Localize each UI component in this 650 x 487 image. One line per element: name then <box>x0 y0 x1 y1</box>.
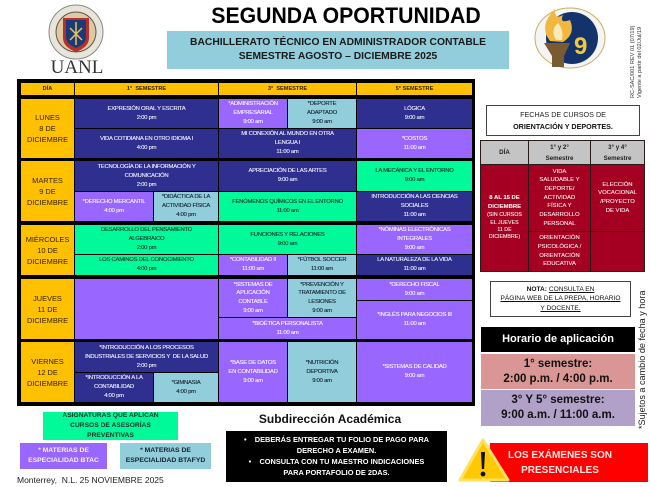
cell: Orientación: EDUCATIVA <box>543 261 576 267</box>
cell: Pensamiento algebraico <box>75 225 218 254</box>
cell: Funciones y relaciones: 9:00 am <box>278 240 297 246</box>
cell: Introducción ciencias sociales: 11:00 am <box>403 212 426 218</box>
cell: dates <box>481 165 528 271</box>
cell: Expresión oral: EXPRESIÓN ORAL Y ESCRITA <box>108 106 185 112</box>
cell: Naturaleza de la vida <box>357 255 472 275</box>
cell: Tecnología <box>75 161 218 191</box>
heading: application schedule <box>481 327 635 352</box>
cell: La mecánica: 9:00 am <box>405 177 424 183</box>
cell: Sistemas de aplicación: *SISTEMAS DE <box>234 282 272 288</box>
cell: Contabilidad II: *CONTABILIDAD II <box>230 257 276 263</box>
day: Wednesday: DICIEMBRE <box>27 256 68 266</box>
cell: Deporte adaptado: ADAPTADO <box>307 110 337 116</box>
day: Monday: DICIEMBRE <box>27 135 68 144</box>
panel: instructions: • CONSULTA CON TU MAESTRO INDICACIONES <box>249 457 424 466</box>
cell: Derecho mercantil: 4:00 pm <box>104 208 124 214</box>
logo: Preparatoria 9 <box>534 8 606 68</box>
cell: Introducción ciencias sociales: INTRODUCCIÓN A LAS CIENCIAS <box>371 194 458 200</box>
cell: Deporte adaptado <box>288 99 356 128</box>
subtitle banner: SEMESTRE AGOSTO – DICIEMBRE 2025 <box>239 51 437 62</box>
cell: Inglés para negocios <box>357 301 472 339</box>
cell: Vida saludable: VIDA <box>553 169 566 175</box>
cell: Naturaleza de la vida: LA NATURALEZA DE LA VIDA <box>377 257 452 263</box>
cell: Naturaleza de la vida: 11:00 am <box>403 266 426 272</box>
title: SEGUNDA OPORTUNIDAD <box>211 3 481 28</box>
header: 3rd and 4th semester <box>591 141 644 164</box>
day: Wednesday: 10 DE <box>37 246 58 254</box>
cell: Didáctica <box>154 192 218 221</box>
cell: Gimnasia: 4:00 pm <box>176 388 196 394</box>
day: Thursday <box>21 279 74 339</box>
cell: Elección vocacional: DE VIDA <box>606 208 629 214</box>
cell: Fenómenos químicos <box>219 192 356 221</box>
day: Tuesday: DICIEMBRE <box>27 198 68 206</box>
day: Tuesday <box>21 161 74 221</box>
block: first semester schedule: 1° semestre: <box>524 358 592 370</box>
day: Thursday: 11 DE <box>37 304 57 314</box>
header: 3rd semester: 3° SEMESTRE <box>268 86 307 92</box>
cell: Expresión oral <box>75 99 218 128</box>
cell: Vida saludable: DEPORTE/ <box>544 186 574 192</box>
legend: preventive courses <box>43 412 178 440</box>
cell: Sistemas de calidad: 9:00 am <box>405 373 424 379</box>
cell: Mi conexión: LENGUA I <box>275 140 300 146</box>
icon: warning triangle <box>458 438 510 482</box>
cell: Nóminas electrónicas: INTEGRALES <box>397 236 432 242</box>
cell: dates: 11 DE <box>497 227 512 233</box>
cell: Administración empresarial: EMPRESARIAL <box>233 110 273 116</box>
cell: dates: 8 AL 15 DE <box>489 195 520 201</box>
cell: La mecánica <box>357 161 472 191</box>
banner: exams in person: LOS EXÁMENES SON <box>508 450 612 460</box>
panel: instructions: DERECHO A EXAMEN. <box>297 446 376 455</box>
cell: Pensamiento algebraico: ALGEBRAICO <box>129 236 164 242</box>
legend: preventive courses: ASIGNATURAS QUE APLICAN <box>62 412 159 419</box>
subtitle banner <box>167 31 509 69</box>
cell: Deporte adaptado: *DEPORTE <box>308 101 336 107</box>
note box <box>490 281 631 317</box>
cell: Inglés para negocios: 11:00 am <box>403 321 426 327</box>
cell: Prevención: TRATAMIENTO DE <box>298 290 346 296</box>
day: Tuesday: 9 DE <box>39 186 56 196</box>
header: day <box>21 83 74 95</box>
cell: Procesos industriales: 2:00 pm <box>137 362 156 368</box>
document code: Vigente a partir del 02/Jul/19 <box>637 27 643 98</box>
heading: orientation and sports dates: FECHAS DE CURSOS DE <box>520 110 606 118</box>
cell: Introducción contabilidad: *INTRODUCCIÓN A LA <box>85 375 143 381</box>
legend: preventive courses: CURSOS DE ASESORÍAS <box>70 422 151 429</box>
cell: empty first semester Thursday <box>75 279 218 339</box>
cell: Sistemas de aplicación: CONTABLE <box>238 299 268 305</box>
cell: Deporte adaptado: 9:00 am <box>312 119 332 125</box>
cell: Contabilidad II: 11:00 am <box>242 266 264 272</box>
day: Friday <box>21 342 74 402</box>
panel: instructions: PARA PORTAFOLIO DE 2DAS. <box>283 468 390 477</box>
cell: Contabilidad II <box>219 255 287 275</box>
cell: Sistemas de aplicación: APLICACIÓN <box>236 290 270 296</box>
header: 5th semester <box>357 83 472 95</box>
cell: Tecnología: COMUNICACIÓN <box>125 172 168 178</box>
cell: dates: DICIEMBRE <box>488 204 521 210</box>
cell: Introducción contabilidad <box>75 373 153 402</box>
cell: Didáctica: ACTIVIDAD FÍSICA <box>162 203 210 209</box>
cell: Vida saludable: DESARROLLO <box>539 212 580 218</box>
cell: Funciones y relaciones: FUNCIONES Y RELACIONES <box>250 232 325 238</box>
cell: Caminos del conocimiento <box>75 255 218 275</box>
panel: exam schedule table <box>17 79 475 406</box>
cell: Vida cotidiana: 4:00 pm <box>137 144 156 150</box>
cell: Orientación: PSICOLÓGICA / <box>538 244 581 250</box>
cell: Vida saludable: PERSONAL <box>543 221 576 227</box>
cell: Pensamiento algebraico: DESARROLLO DEL PENSAMIENTO <box>101 227 192 233</box>
cell: Derecho mercantil <box>75 192 153 221</box>
cell: Procesos industriales: *INTRODUCCIÓN A LOS PROCESOS <box>99 344 194 350</box>
cell: Administración empresarial <box>219 99 287 128</box>
day: Thursday: DICIEMBRE <box>27 316 68 324</box>
cell: Fútbol soccer: *FÚTBOL SOCCER <box>298 257 346 263</box>
legend: BTAFYD: ESPECIALIDAD BTAFYD <box>126 457 205 464</box>
header: day: DÍA <box>499 149 510 156</box>
day: Friday: 12 DE <box>37 368 58 376</box>
header: 3rd and 4th semester: 3° y 4° <box>608 144 627 150</box>
cell: Vida saludable: SALUDABLE Y <box>539 177 580 183</box>
cell: Vida cotidiana <box>75 129 218 158</box>
cell: Fenómenos químicos: FENÓMENOS QUÍMICOS EN EL ENTORNO <box>232 198 343 204</box>
block: third and fifth semester schedule: 3° Y 5° semestre: <box>511 394 605 406</box>
day: Wednesday: MIÉRCOLES <box>26 234 69 244</box>
cell: Bioética: 11:00 am <box>276 330 299 336</box>
cell: Lógica: 9:00 am <box>405 114 424 120</box>
header: 1st and 2nd semester: 1° y 2° <box>550 144 569 150</box>
cell: Caminos del conocimiento: LOS CAMINOS DEL CONOCIMIENTO <box>99 257 194 263</box>
cell: Elección vocacional: ELECCIÓN <box>602 182 633 188</box>
cell: Nutrición deportiva: *NUTRICIÓN <box>306 360 338 366</box>
cell: Apreciación <box>219 161 356 191</box>
cell: Derecho fiscal: 9:00 am <box>405 290 424 296</box>
banner: exams in person: PRESENCIALES <box>521 464 599 476</box>
note box: Y DOCENTE. <box>540 305 581 312</box>
cell: Mi conexión: 11:00 am <box>276 149 299 155</box>
side note: *Sujetos a cambio de fecha y hora <box>637 290 647 429</box>
cell: Prevención: LESIONES <box>308 299 336 305</box>
cell: Nóminas electrónicas: *NÓMINAS ELECTRÓNICAS <box>378 227 450 233</box>
header: 5th semester: 5° SEMESTRE <box>396 86 433 92</box>
day: Monday: LUNES <box>35 113 60 122</box>
legend: BTAC: ESPECIALIDAD BTAC <box>28 457 99 464</box>
block: third and fifth semester schedule: 9:00 a.m. / 11:00 a.m. <box>501 409 615 421</box>
cell: Pensamiento algebraico: 2:00 pm <box>137 245 156 251</box>
cell: Funciones y relaciones <box>219 225 356 254</box>
cell: Tecnología: 2:00 pm <box>137 182 156 188</box>
cell: Didáctica: 4:00 pm <box>176 212 196 218</box>
block: first semester schedule <box>481 354 635 389</box>
cell: Nóminas electrónicas <box>357 225 472 254</box>
cell: Prevención <box>288 279 356 317</box>
cell: Didáctica: *DIDÁCTICA DE LA <box>162 194 210 200</box>
header: 3rd semester <box>219 83 356 95</box>
cell: Elección vocacional: /PROYECTO <box>600 199 635 205</box>
cell: Mi conexión <box>219 129 356 158</box>
cell: Nutrición deportiva: DEPORTIVA <box>306 368 338 374</box>
logo: UANL seal <box>48 4 104 60</box>
day: Friday: VIERNES <box>31 356 64 366</box>
cell: Bioética: *BIOÉTICA PERSONALISTA <box>252 320 323 326</box>
cell: Vida cotidiana: VIDA COTIDIANA EN OTRO IDIOMA I <box>100 136 193 142</box>
cell: Orientación <box>529 232 590 271</box>
cell: Expresión oral: 2:00 pm <box>137 114 156 120</box>
cell: Costos: 11:00 am <box>403 144 426 150</box>
cell: Introducción ciencias sociales <box>357 192 472 221</box>
cell: Mi conexión: MI CONEXIÓN AL MUNDO EN OTRA <box>241 131 334 137</box>
cell: Introducción contabilidad: 4:00 pm <box>104 393 124 399</box>
cell: Introducción ciencias sociales: SOCIALES <box>401 203 428 209</box>
day: Thursday: JUEVES <box>33 294 62 302</box>
cell: Lógica: LÓGICA <box>404 106 425 112</box>
header: day: DÍA <box>43 86 52 92</box>
cell: Costos <box>357 129 472 158</box>
cell: Orientación: ORIENTACIÓN <box>539 252 580 258</box>
logo: Preparatoria 9: 9 <box>574 33 587 60</box>
day: Wednesday <box>21 225 74 275</box>
cell: Vida saludable <box>529 165 590 231</box>
cell: Administración empresarial: 9:00 am <box>243 119 263 125</box>
header: 1st semester <box>75 83 218 95</box>
cell: dates: EL JUEVES <box>490 220 519 226</box>
cell: Base de datos: 9:00 am <box>243 378 263 384</box>
cell: Fútbol soccer: 11:00 am <box>311 266 333 272</box>
note box: PÁGINA WEB DE LA PREPA, HORARIO <box>500 295 621 302</box>
cell: Base de datos: EN CONTABILIDAD <box>228 368 278 374</box>
heading: orientation and sports dates: ORIENTACIÓN Y DEPORTES. <box>513 122 613 130</box>
block: third and fifth semester schedule <box>481 390 635 426</box>
panel: orientation table <box>480 140 645 272</box>
cell: Administración empresarial: *ADMINISTRACIÓN <box>228 101 278 107</box>
cell: Nutrición deportiva: 9:00 am <box>312 378 332 384</box>
cell: Gimnasia: *GIMNASIA <box>172 380 200 386</box>
date line: Monterrey, N.L. 25 NOVIEMBRE 2025 <box>17 475 164 485</box>
cell: Introducción contabilidad: CONTABILIDAD <box>94 384 134 390</box>
cell: Prevención: 9:00 am <box>312 308 332 314</box>
heading: Subdirección Académica: Subdirección Académica <box>259 412 401 426</box>
legend: BTAC <box>20 443 107 469</box>
cell: Base de datos: *BASE DE DATOS <box>230 360 276 366</box>
cell: Fenómenos químicos: 11:00 am <box>276 208 299 214</box>
legend: preventive courses: PREVENTIVAS <box>87 432 134 439</box>
cell: empty <box>591 232 644 271</box>
legend: BTAFYD <box>120 443 211 469</box>
cell: Inglés para negocios: *INGLÉS PARA NEGOCIOS III <box>377 312 452 318</box>
cell: Derecho mercantil: *DERECHO MERCANTIL <box>83 198 145 204</box>
day: Tuesday: MARTES <box>32 176 63 184</box>
logo: UANL wordmark: UANL <box>51 57 103 78</box>
panel: instructions: • DEBERÁS ENTREGAR TU FOLIO DE PAGO PARA <box>244 435 429 444</box>
header: 1st and 2nd semester: Semestre <box>546 154 573 162</box>
cell: dates: (SIN CURSOS <box>487 212 522 218</box>
cell: Sistemas de aplicación: 9:00 am <box>243 308 263 314</box>
cell: Derecho fiscal: *DERECHO FISCAL <box>389 282 440 288</box>
cell: Procesos industriales <box>75 342 218 372</box>
day: Friday: DICIEMBRE <box>27 378 68 388</box>
header: 3rd and 4th semester: Semestre <box>604 154 631 162</box>
heading: orientation and sports dates <box>486 105 640 136</box>
panel: instructions <box>226 431 447 482</box>
cell: Base de datos <box>219 342 287 402</box>
heading: application schedule: Horario de aplicación <box>502 333 614 345</box>
cell: Elección vocacional <box>591 165 644 231</box>
cell: La mecánica: LA MECÁNICA Y EL ENTORNO <box>375 168 454 174</box>
cell: Lógica <box>357 99 472 128</box>
cell: Sistemas de aplicación <box>219 279 287 317</box>
cell: Apreciación: 9:00 am <box>278 177 297 183</box>
legend: BTAC: * MATERIAS DE <box>38 447 89 454</box>
document code <box>630 26 643 98</box>
cell: Vida saludable: ACTIVIDAD <box>544 195 575 201</box>
cell: Orientación: ORIENTACIÓN <box>539 235 580 241</box>
header: 1st and 2nd semester <box>529 141 590 164</box>
note box: NOTA: CONSULTA EN <box>527 286 594 293</box>
cell: Fútbol soccer <box>288 255 356 275</box>
header: 1st semester: 1° SEMESTRE <box>127 86 166 92</box>
cell: Bioética <box>219 318 356 339</box>
cell: Derecho fiscal <box>357 279 472 300</box>
cell: Gimnasia <box>154 373 218 402</box>
cell: Costos: *COSTOS <box>402 136 427 142</box>
cell: Procesos industriales: INDUSTRIALES DE SERVICIOS Y DE LA SALUD <box>85 354 208 360</box>
cell: Prevención: *PREVENCIÓN Y <box>300 282 344 288</box>
subtitle banner: BACHILLERATO TÉCNICO EN ADMINISTRADOR CONTABLE <box>190 36 486 48</box>
cell: Sistemas de calidad <box>357 342 472 402</box>
legend: BTAFYD: * MATERIAS DE <box>140 447 191 454</box>
day: Monday <box>21 99 74 158</box>
cell: Vida saludable: FÍSICA Y <box>547 203 572 209</box>
document code: RC-SAC/001 REV 01 (07/19) <box>630 26 636 98</box>
banner: exams in person <box>490 443 648 482</box>
cell: Sistemas de calidad: *SISTEMAS DE CALIDAD <box>382 364 447 370</box>
cell: Caminos del conocimiento: 4:00 pm <box>137 266 156 272</box>
block: first semester schedule: 2:00 p.m. / 4:00 p.m. <box>503 372 613 384</box>
cell: Tecnología: TECNOLOGÍA DE LA INFORMACIÓN Y <box>97 164 196 170</box>
header: day <box>481 141 528 164</box>
cell: Elección vocacional: VOCACIONAL <box>598 190 637 196</box>
cell: Nutrición deportiva <box>288 342 356 402</box>
cell: dates: DICIEMBRE) <box>489 234 520 240</box>
cell: Apreciación: APRECIACIÓN DE LAS ARTES <box>248 168 327 174</box>
day: Monday: 8 DE <box>39 124 56 133</box>
cell: Nóminas electrónicas: 9:00 am <box>405 245 424 251</box>
